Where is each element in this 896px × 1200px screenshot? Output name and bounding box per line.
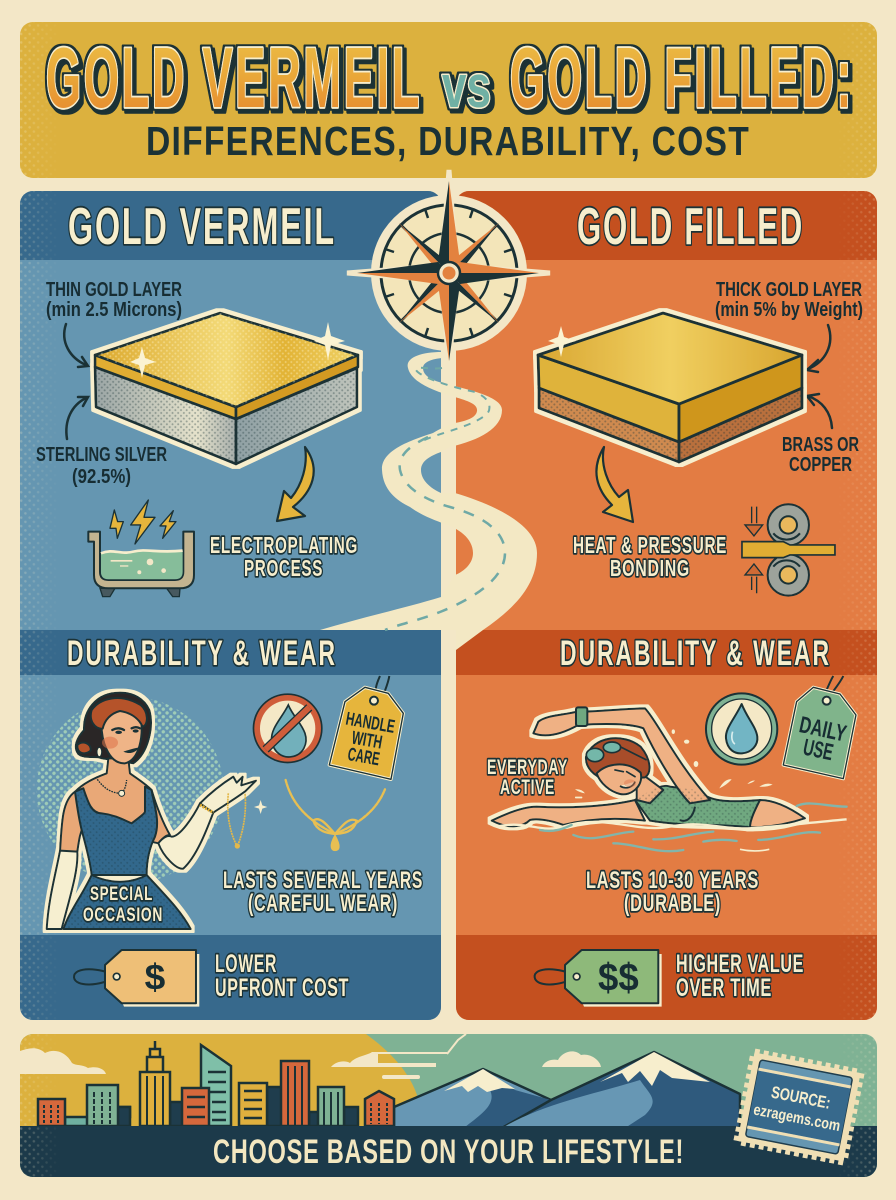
filled slab (538, 313, 802, 462)
label: lower upfront cost: LOWER (215, 950, 277, 978)
label: lower upfront cost (215, 950, 349, 1002)
price tag: single dollar: $ (145, 956, 165, 997)
sparkles (130, 322, 345, 378)
tag: daily use (783, 676, 856, 779)
source stamp: SOURCE: (770, 1083, 832, 1113)
source stamp: ezragems.com (752, 1102, 842, 1135)
label: everyday active: ACTIVE (500, 776, 555, 799)
tag: daily use: USE (801, 734, 836, 765)
label: sterling silver: STERLING SILVER (36, 444, 167, 466)
illustration: woman in evening dress (37, 693, 385, 929)
subtitle: DIFFERENCES, DURABILITY, COST (146, 118, 750, 164)
label: higher value over time (676, 950, 804, 1002)
arrow: to thick gold (807, 325, 830, 372)
centre divider (441, 191, 456, 1020)
label: heat and pressure bonding: HEAT & PRESSURE (573, 532, 727, 558)
heading: durability left: DURABILITY & WEAR (67, 634, 337, 673)
label: special occasion: OCCASION (83, 905, 163, 926)
winding road (320, 352, 537, 650)
arrow: to bonding (596, 447, 633, 522)
title: GOLD VERMEIL (46, 31, 422, 126)
heading: gold vermeil: GOLD VERMEIL (68, 198, 336, 256)
icon: water drop (705, 692, 778, 766)
dark ground band (20, 1126, 877, 1177)
label: sterling silver (36, 444, 167, 488)
arrow: to gold layer (64, 324, 88, 367)
label: everyday active (487, 756, 568, 799)
building windows (44, 1066, 387, 1126)
label: lasts several years: (CAREFUL WEAR) (248, 890, 398, 917)
label: higher value over time: OVER TIME (676, 974, 772, 1002)
panel: gold vermeil (20, 191, 441, 1020)
label: lasts 10-30 years (586, 867, 759, 917)
label: lasts 10-30 years: LASTS 10-30 YEARS (586, 867, 759, 894)
label: heat and pressure bonding (573, 532, 727, 581)
label: thin gold layer: (min 2.5 Microns) (46, 299, 182, 321)
label: brass or copper (782, 434, 859, 476)
icon: plating bath (88, 500, 194, 597)
arrow: to silver layer (66, 397, 88, 439)
label: lasts several years (223, 867, 423, 917)
label: lasts 10-30 years: (DURABLE) (624, 890, 721, 917)
label: lasts several years: LASTS SEVERAL YEARS (223, 867, 423, 894)
label: special occasion: SPECIAL (90, 884, 153, 905)
header banner (20, 22, 877, 178)
label: thick gold layer: (min 5% by Weight) (715, 299, 863, 321)
price tag: double dollar: $$ (598, 956, 639, 1000)
tag: handle with care: WITH (350, 727, 384, 753)
label: everyday active: EVERYDAY (487, 756, 568, 779)
label: higher value over time: HIGHER VALUE (676, 950, 804, 978)
label: electroplating process: PROCESS (244, 555, 323, 581)
price tag: double dollar (535, 950, 662, 1007)
label: sterling silver: (92.5%) (72, 466, 131, 488)
clouds (20, 1034, 601, 1079)
mountains (394, 1052, 740, 1128)
panel: gold filled (456, 191, 877, 1020)
label: electroplating process: ELECTROPLATING (210, 532, 358, 558)
price tag: single dollar (74, 950, 199, 1007)
sky: sun area (20, 1034, 417, 1130)
icon: no water (253, 693, 323, 763)
title: vs (442, 53, 491, 120)
tag: handle with care: HANDLE (344, 708, 397, 737)
tag: handle with care (329, 676, 403, 779)
label: brass or copper: BRASS OR (782, 434, 859, 456)
icon: rollers (742, 504, 835, 596)
sparkle (548, 326, 576, 357)
label: thin gold layer (46, 279, 182, 321)
label: electroplating process (210, 532, 358, 581)
vermeil slab (95, 313, 358, 464)
tag: handle with care: CARE (346, 743, 381, 769)
footer banner (20, 1034, 877, 1177)
source stamp (737, 1053, 861, 1161)
compass (347, 170, 550, 368)
label: special occasion (83, 884, 163, 926)
city skyline (38, 1041, 394, 1126)
arrow: to electroplating (277, 447, 314, 521)
label: thick gold layer (715, 279, 863, 321)
label: thin gold layer: THIN GOLD LAYER (46, 279, 182, 301)
label: brass or copper: COPPER (789, 454, 852, 476)
label: heat and pressure bonding: BONDING (610, 555, 690, 581)
footer call to action: CHOOSE BASED ON YOUR LIFESTYLE! (213, 1133, 684, 1171)
illustration: swimmer (492, 707, 847, 851)
arrow: to brass (807, 394, 832, 428)
icon: necklace (286, 780, 385, 851)
tag: daily use: DAILY (797, 711, 849, 747)
label: lower upfront cost: UPFRONT COST (215, 974, 349, 1002)
